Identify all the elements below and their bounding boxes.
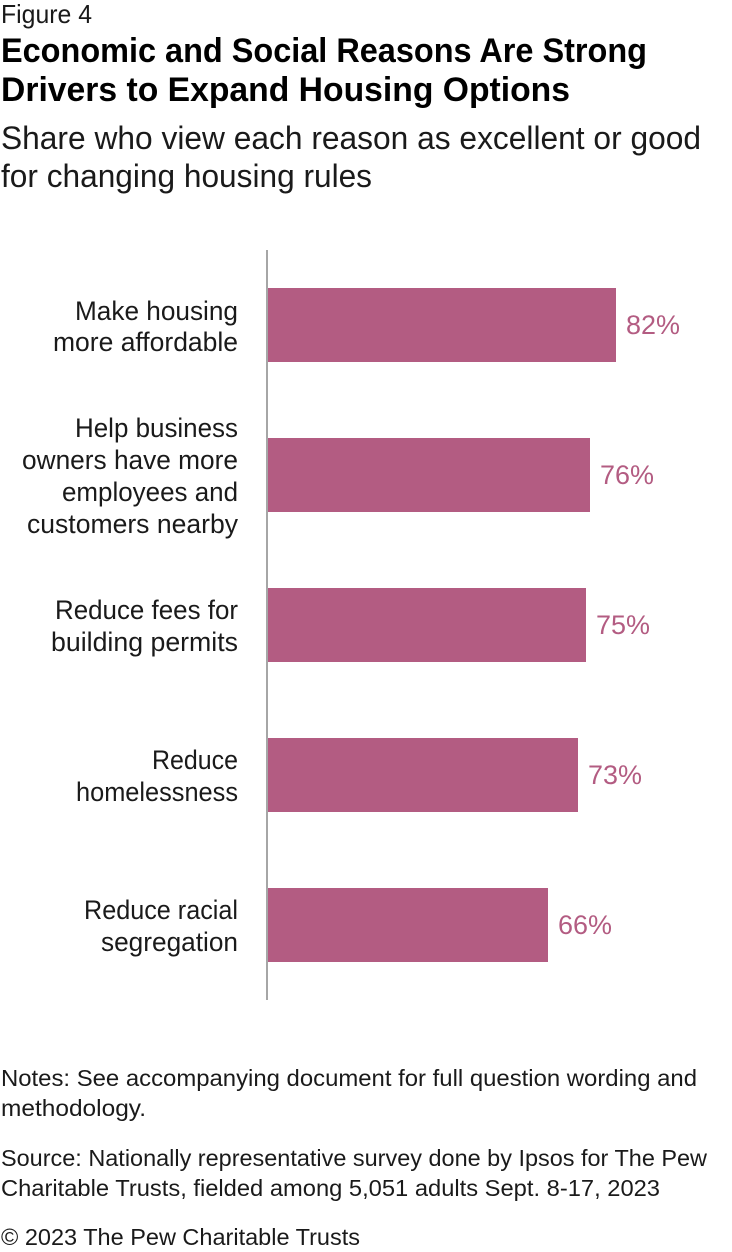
copyright: © 2023 The Pew Charitable Trusts bbox=[1, 1224, 360, 1250]
subtitle: Share who view each reason as excellent or good bbox=[1, 120, 701, 156]
row: reduce fees for building permits bbox=[51, 588, 650, 662]
row: reduce fees for building permits: 75% bbox=[596, 610, 650, 640]
subtitle bbox=[1, 120, 701, 194]
row: reduce racial segregation bbox=[84, 888, 612, 962]
bar chart bbox=[22, 250, 680, 1000]
row: help business owners: Help business bbox=[75, 413, 238, 443]
source bbox=[1, 1145, 707, 1201]
row: reduce fees for building permits: building permits bbox=[51, 627, 238, 657]
row: help business owners: employees and bbox=[62, 477, 238, 507]
row: reduce racial segregation: Reduce racial bbox=[84, 895, 238, 925]
title: Economic and Social Reasons Are Strong bbox=[1, 32, 647, 70]
title: Drivers to Expand Housing Options bbox=[1, 71, 570, 109]
row: reduce homelessness bbox=[76, 738, 642, 812]
axis line bbox=[266, 250, 268, 1000]
notes bbox=[1, 1065, 697, 1121]
row: make housing more affordable: Make housing bbox=[75, 296, 238, 326]
row: reduce homelessness: Reduce bbox=[152, 745, 238, 775]
source: Source: Nationally representative survey done by Ipsos for The Pew bbox=[1, 1145, 707, 1171]
row: make housing more affordable bbox=[53, 288, 680, 362]
row: help business owners: customers nearby bbox=[27, 509, 238, 539]
notes: methodology. bbox=[1, 1095, 146, 1121]
row: help business owners: owners have more bbox=[22, 445, 238, 475]
row: reduce fees for building permits: Reduce fees for bbox=[55, 595, 238, 625]
row: reduce homelessness: homelessness bbox=[76, 777, 238, 807]
row: reduce racial segregation: 66% bbox=[558, 910, 612, 940]
row: make housing more affordable: 82% bbox=[626, 310, 680, 340]
subtitle: for changing housing rules bbox=[1, 158, 372, 194]
source: Charitable Trusts, fielded among 5,051 adults Sept. 8-17, 2023 bbox=[1, 1175, 660, 1201]
row: make housing more affordable: more affordable bbox=[53, 327, 238, 357]
row: reduce homelessness: 73% bbox=[588, 760, 642, 790]
row: reduce racial segregation: segregation bbox=[101, 927, 238, 957]
title bbox=[1, 32, 647, 109]
row: help business owners bbox=[22, 413, 654, 539]
notes: Notes: See accompanying document for full question wording and bbox=[1, 1065, 697, 1091]
row: help business owners: 76% bbox=[600, 460, 654, 490]
